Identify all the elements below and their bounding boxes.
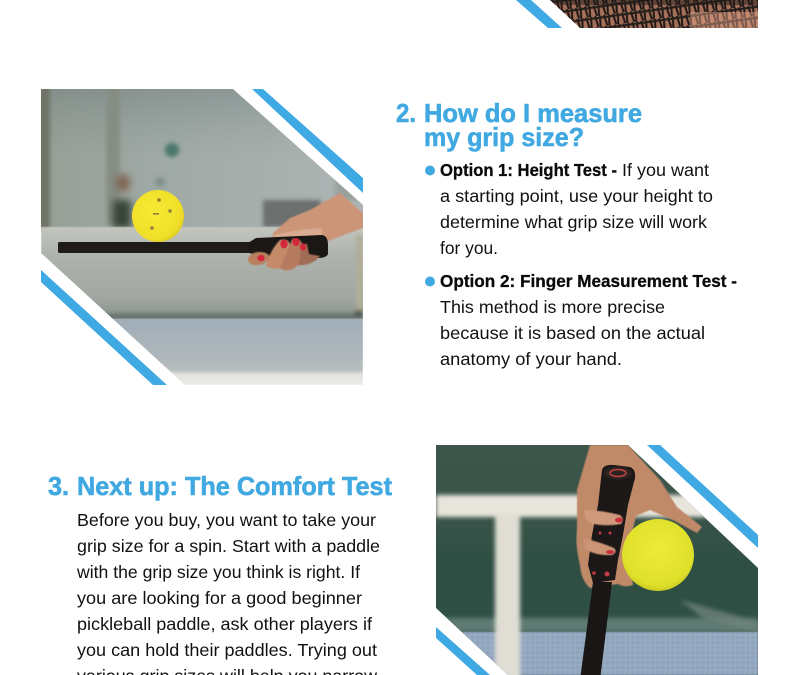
heading: section 3: Next up: The Comfort Test: [77, 471, 392, 501]
ball: [622, 519, 694, 591]
bullet: option 2 finger measurement test: anatomy of your hand.: [440, 349, 622, 369]
hand: fingers over grip: [248, 239, 320, 270]
bullet: option 1 height test: for you.: [440, 238, 498, 258]
photo: paddle net from previous section: [516, 0, 760, 30]
paddle grip: [248, 235, 328, 258]
heading: section 2: 2.: [396, 98, 416, 128]
hand: arm and palm behind grip: [272, 192, 363, 242]
accent stripes: grip photo: [436, 445, 758, 675]
bullet: option 2 finger measurement test: because it is based on the actual: [440, 323, 705, 343]
bullet: option 1 height test: a starting point, use your height to: [440, 186, 713, 206]
bullet: option 1 height test: If you want: [622, 160, 709, 180]
bullet: option 2 finger measurement test: This method is more precise: [440, 297, 665, 317]
bullet: option 1 height test: determine what grip size will work: [440, 212, 707, 232]
bullet: option 2 finger measurement test: Option 2: Finger Measurement Test -: [440, 271, 737, 291]
accent stripes: paddle photo: [41, 89, 363, 385]
text block: comfort test: with the grip size you think is right. If: [76, 562, 360, 582]
ball: [132, 190, 184, 242]
paddle: [58, 242, 253, 253]
text block: comfort test: you can hold their paddles. Trying out: [77, 640, 377, 660]
accent stripe: top photo: [516, 0, 562, 28]
bullet: option 1 height test: [425, 160, 713, 258]
text block: comfort test: pickleball paddle, ask other players if: [77, 614, 372, 634]
fingers wrapped on grip: [583, 510, 623, 555]
text block: comfort test: you are looking for a good beginner: [77, 588, 362, 608]
photo: paddle held flat with ball balanced on it: [36, 85, 364, 385]
bullet: option 2 finger measurement test: [425, 271, 737, 369]
text block: comfort test: [76, 510, 380, 675]
heading: section 2: How do I measure: [424, 98, 642, 128]
text block: comfort test: Before you buy, you want to take your: [77, 510, 376, 530]
paddle grip and handle: [580, 465, 635, 675]
heading: section 2: [396, 98, 642, 152]
hand: palm and thumb behind grip: [576, 445, 702, 588]
heading: section 2: my grip size?: [424, 122, 584, 152]
text block: comfort test: grip size for a spin. Start with a paddle: [77, 536, 380, 556]
bullet: option 1 height test: Option 1: Height Test -: [440, 160, 617, 180]
photo: hand holding paddle grip and ball: [436, 445, 760, 675]
heading: section 3: 3.: [48, 471, 69, 501]
